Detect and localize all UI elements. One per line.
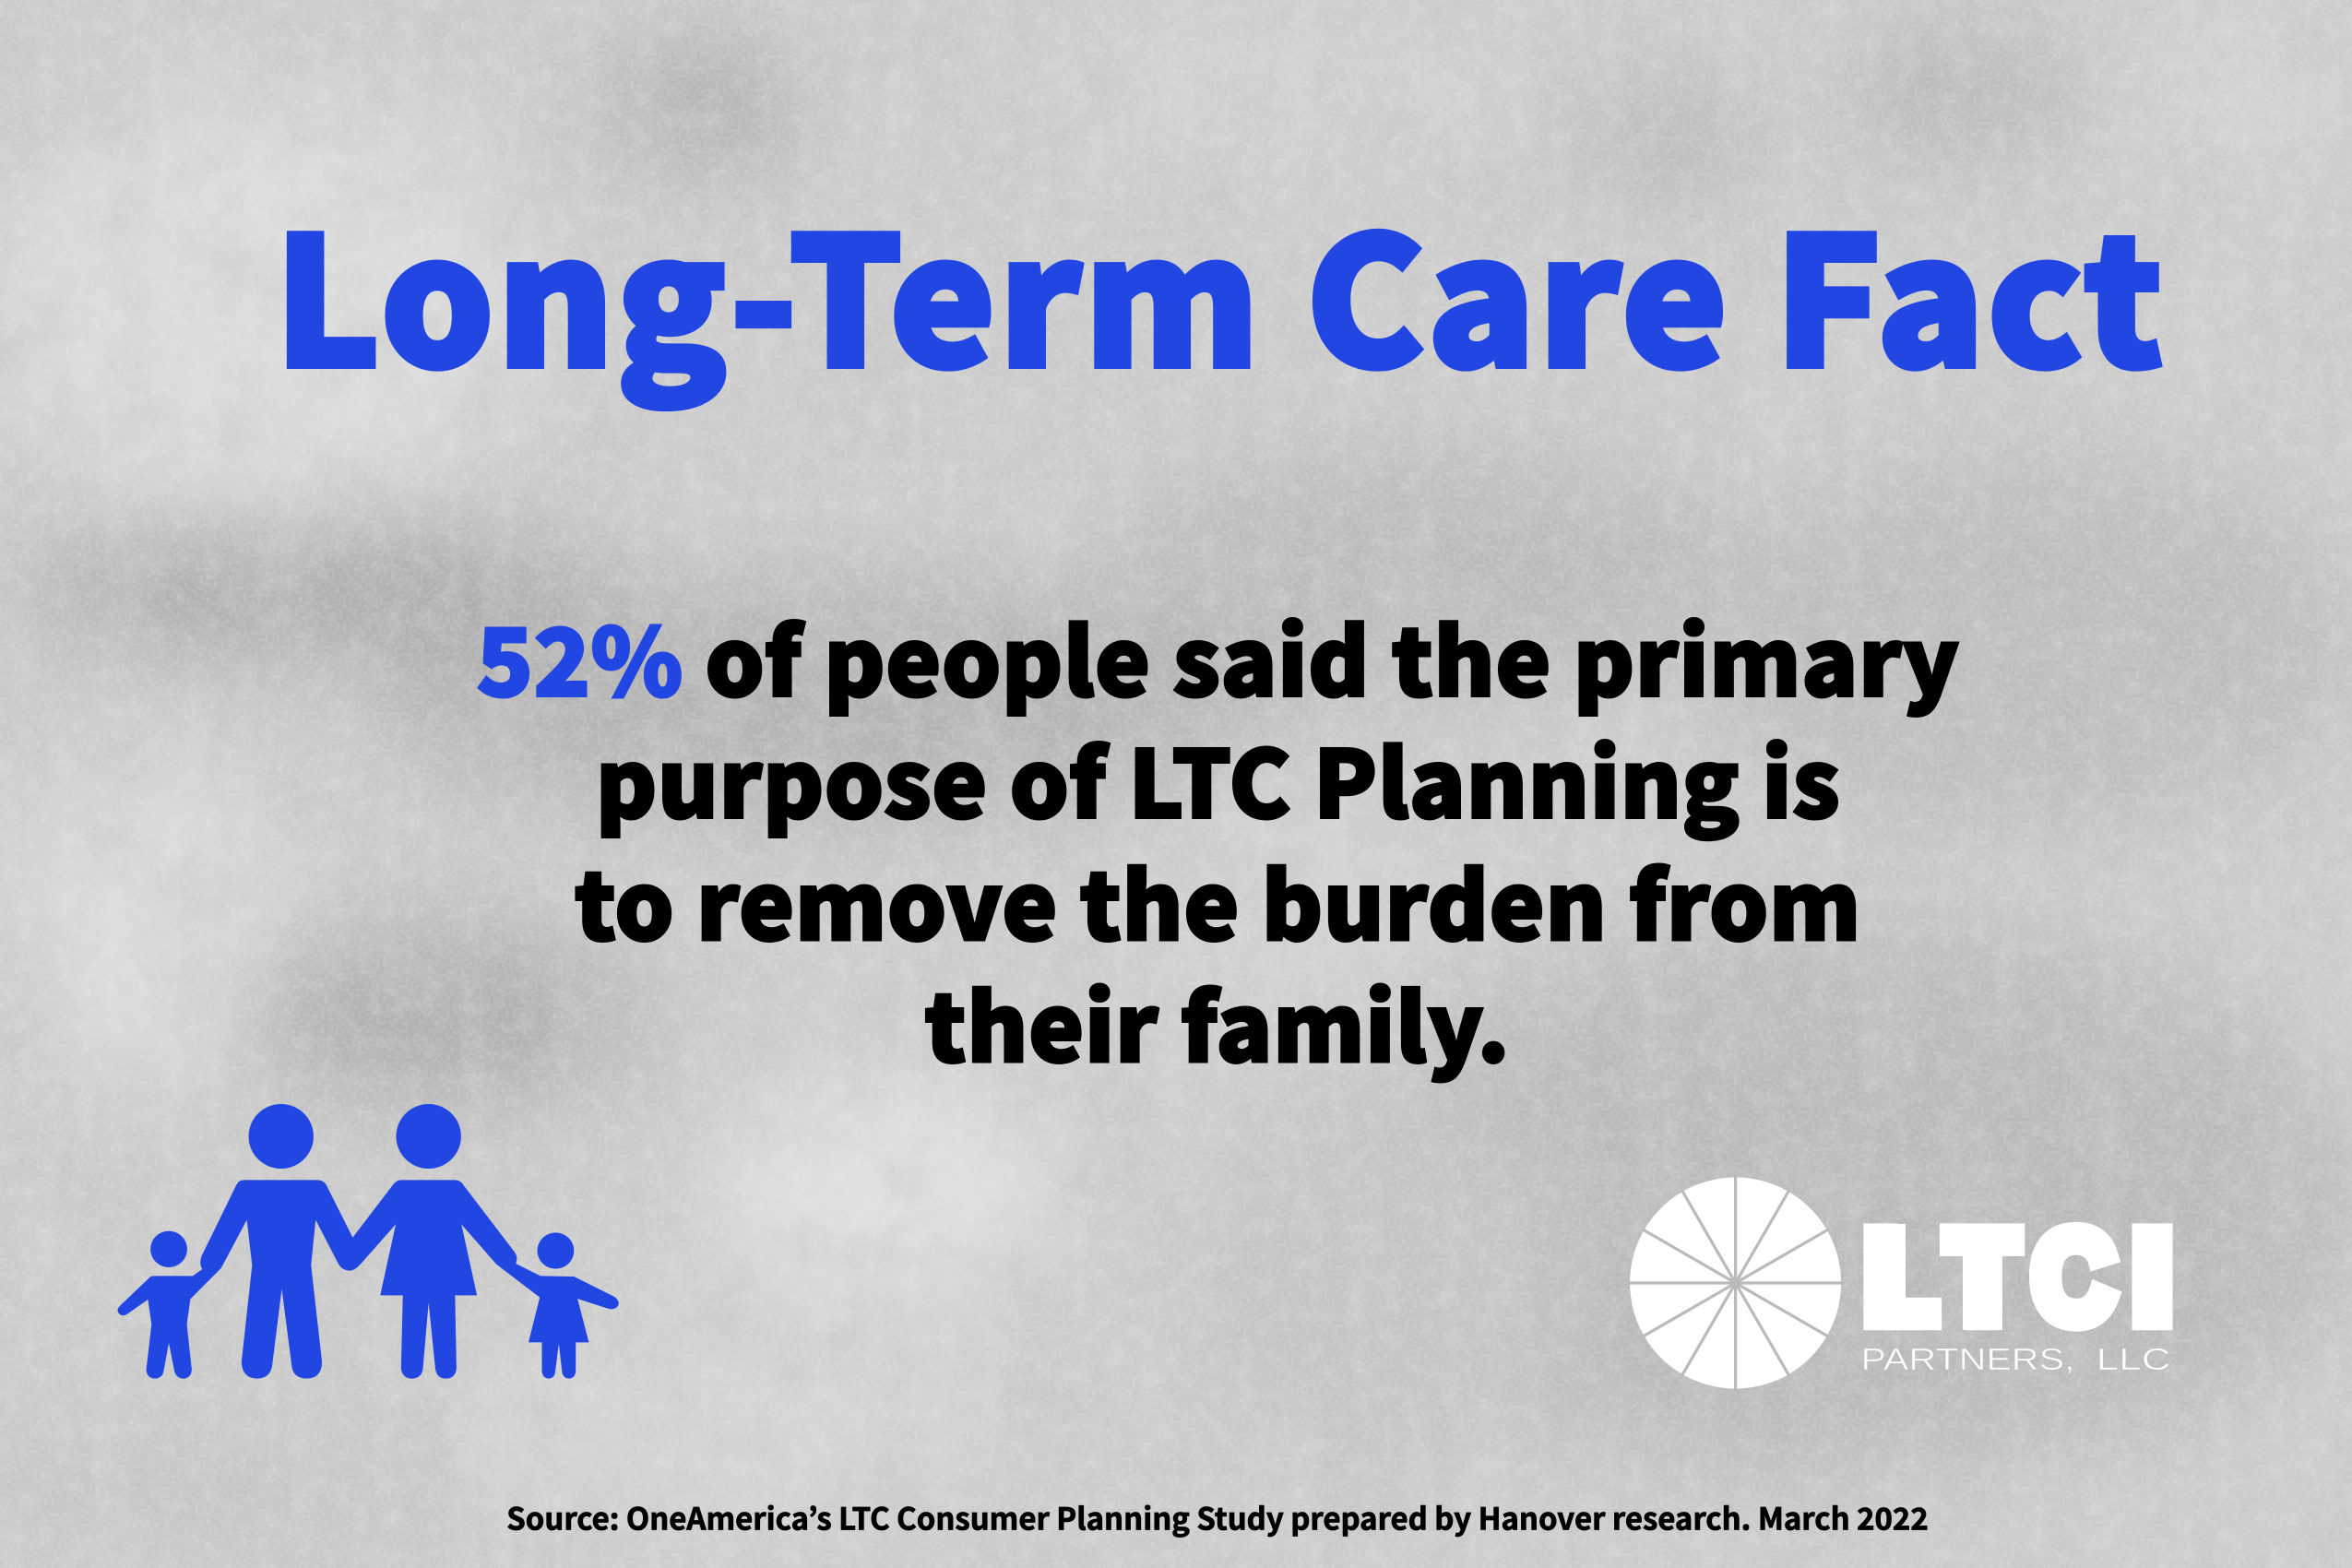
logo: LTCI Partners, LLC	[1627, 1175, 2172, 1391]
main statement: their family.	[925, 955, 1510, 1089]
icon: family holding hands	[118, 1104, 619, 1379]
logo subtitle: PARTNERS,	[1861, 1343, 2075, 1377]
logo subtitle	[1861, 1343, 2171, 1377]
main statement: purpose of LTC Planning is	[596, 710, 1840, 845]
logo wheel	[1627, 1175, 1844, 1391]
logo wordmark: C	[2033, 1205, 2114, 1348]
source note: Source: OneAmerica’s LTC Consumer Planning Study prepared by Hanover research. March 2022	[506, 1496, 1929, 1538]
main statement	[477, 588, 1959, 1089]
logo wordmark: T	[1946, 1206, 2018, 1349]
logo wordmark: I	[2132, 1206, 2172, 1349]
logo wordmark: L	[1864, 1206, 1937, 1348]
main statement: to remove the burden from	[575, 833, 1861, 968]
title: Long-Term Care Fact	[274, 160, 2166, 418]
logo wordmark	[1864, 1205, 2172, 1349]
logo subtitle: LLC	[2097, 1343, 2171, 1377]
main statement: 52% of people said the primary	[477, 588, 1959, 723]
